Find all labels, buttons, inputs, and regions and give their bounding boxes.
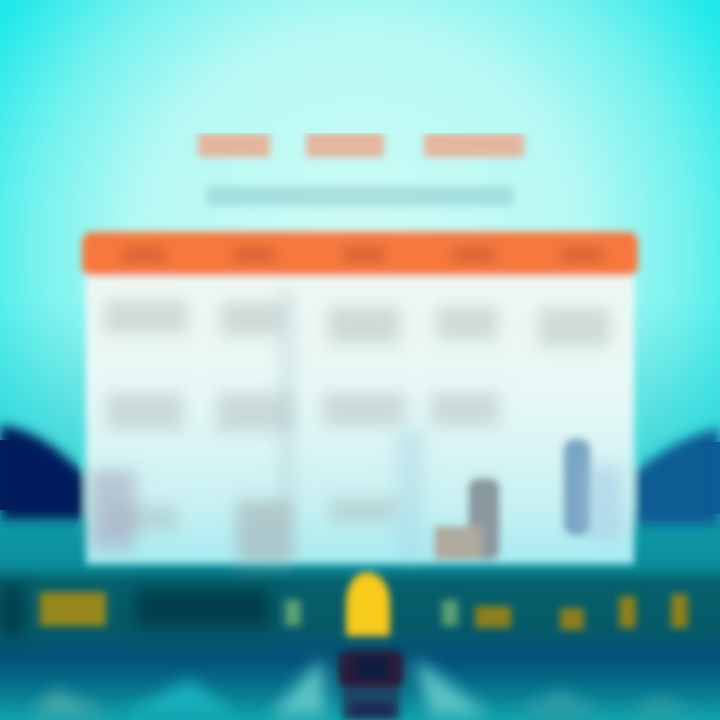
right blue hill xyxy=(635,428,720,525)
panel: main table card xyxy=(86,268,634,564)
figure: worker in centre xyxy=(338,572,404,720)
left dark icons xyxy=(0,585,270,635)
header labels xyxy=(122,247,604,263)
worker legs xyxy=(342,688,400,720)
table column shading and text rows xyxy=(104,300,610,531)
tan base xyxy=(434,526,482,560)
table header bar xyxy=(82,232,638,276)
floor light streaks xyxy=(30,658,700,716)
column divider shade xyxy=(278,290,296,560)
title xyxy=(198,133,524,157)
worker hard hat xyxy=(346,572,390,636)
column shade xyxy=(396,430,424,560)
blue tower halo xyxy=(588,465,622,540)
card body xyxy=(86,268,634,564)
worker body dark xyxy=(338,650,404,688)
blue tower xyxy=(563,438,591,536)
grey tower xyxy=(468,478,500,560)
grey building centre-left xyxy=(236,500,292,564)
left label block yellow xyxy=(40,592,106,626)
worker torso centre xyxy=(356,656,388,680)
right yellow label blocks xyxy=(475,594,688,630)
subtitle xyxy=(206,186,514,206)
lilac building left xyxy=(90,470,136,550)
right small green marker xyxy=(442,600,458,626)
left small green marker xyxy=(285,600,301,626)
worker feet xyxy=(350,702,394,718)
left dark hill xyxy=(0,425,85,520)
